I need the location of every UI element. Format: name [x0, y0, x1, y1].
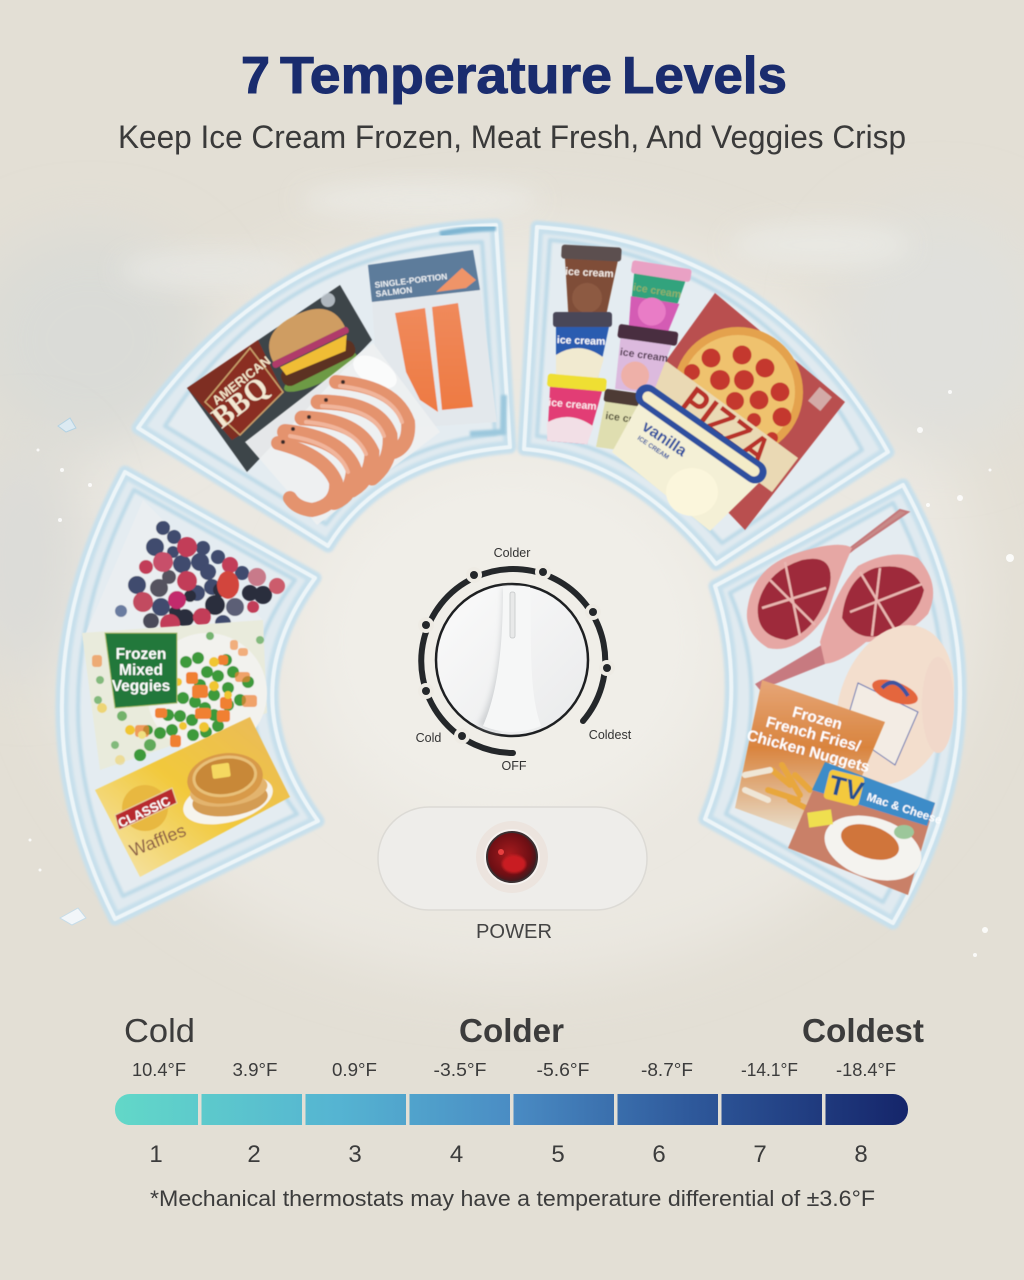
level numbers: 3 [348, 1141, 362, 1168]
food: pizza box [640, 293, 845, 530]
ice block [138, 225, 510, 546]
temperature values: -3.5°F [434, 1060, 486, 1080]
panel: top-right ice tray [524, 227, 888, 564]
dial labels: OFF [502, 759, 527, 773]
green veggie label [105, 633, 177, 708]
scale headings [124, 1012, 924, 1049]
band [640, 358, 798, 492]
food: pizza box: PIZZA [673, 379, 779, 474]
tub: pink lid [610, 324, 679, 397]
food: vanilla tub: vanilla [639, 418, 690, 460]
food: American BBQ box: BBQ [206, 370, 275, 435]
tub: yellow lid [542, 374, 607, 445]
food: frozen mixed veggies bag [82, 620, 267, 770]
tub: blue [553, 312, 612, 378]
tub: cream: ice cre [605, 410, 639, 427]
panel: top-left ice tray [138, 225, 510, 546]
food: salmon pack: SINGLE-PORTION [374, 271, 448, 290]
green veggie label: Veggies [112, 678, 170, 695]
subtitle: Keep Ice Cream Frozen, Meat Fresh, And Veggies Crisp [118, 119, 906, 155]
level numbers: 7 [753, 1141, 767, 1168]
green veggie label: Mixed [119, 662, 163, 679]
temperature values: -14.1°F [741, 1060, 798, 1080]
footnote: *Mechanical thermostats may have a temperature differential of ±3.6°F [150, 1186, 875, 1211]
temperature values: -5.6°F [536, 1060, 590, 1080]
scale headings: Coldest [802, 1012, 924, 1049]
temperature values: 0.9°F [332, 1060, 377, 1080]
power plate [378, 807, 647, 910]
food: shrimp tray [245, 343, 440, 525]
panel: right ice tray [705, 485, 974, 923]
level numbers: 1 [149, 1141, 163, 1168]
food: classic waffles box: CLASSIC [116, 793, 173, 831]
food: french fries bag: French Fries/ [764, 714, 863, 756]
panel: left ice tray [62, 472, 318, 919]
tub: pink lid: ice cream [619, 346, 669, 365]
level numbers: 5 [551, 1141, 565, 1168]
scale headings: Cold [124, 1012, 195, 1049]
food: American BBQ box [187, 285, 372, 472]
ice block [705, 485, 960, 923]
tub: chocolate: ice cream [565, 266, 614, 280]
food: french fries bag: Frozen [790, 704, 844, 733]
food: stacked ice cream tubs [542, 244, 692, 453]
food: vanilla tub: ICE CREAM [636, 435, 670, 461]
title: 7 [241, 47, 270, 105]
waffle stack [184, 748, 271, 821]
temperature scale [115, 1012, 924, 1211]
temperature values: 3.9°F [232, 1060, 278, 1080]
temperature values: 10.4°F [132, 1060, 186, 1080]
dial scale arc [418, 564, 615, 753]
tub: yellow lid: ice cream [548, 397, 597, 413]
level numbers: 2 [247, 1141, 261, 1168]
title [241, 47, 787, 105]
level numbers [149, 1141, 868, 1168]
food: french fries bag [735, 680, 885, 830]
power label: POWER [476, 921, 552, 943]
pizza [673, 327, 803, 457]
food: TV mac and cheese box: TV [826, 770, 867, 807]
level numbers: 8 [854, 1141, 868, 1168]
food: salmon pack: SALMON [375, 285, 413, 299]
tub: green [622, 260, 692, 339]
food: whole chicken [816, 610, 974, 800]
tub: cream [596, 388, 645, 453]
title: Levels [622, 47, 787, 105]
scale headings: Colder [459, 1012, 564, 1049]
temperature values: -18.4°F [836, 1060, 896, 1080]
level numbers: 6 [652, 1141, 666, 1168]
food: TV mac and cheese box [788, 762, 943, 895]
dial knob [436, 584, 588, 736]
water droplets and ice chips [28, 390, 1014, 957]
food: french fries bag: Chicken Nuggets [745, 727, 872, 776]
dial labels [416, 546, 632, 773]
food: steaks [747, 510, 933, 690]
food: TV mac and cheese box: Mac & Cheese [865, 791, 943, 827]
temperature values [132, 1060, 896, 1080]
food: American BBQ box: AMERICAN [209, 353, 273, 408]
food: salmon pack [368, 250, 497, 430]
dial labels: Cold [416, 731, 441, 745]
food: classic waffles box: Waffles [127, 820, 189, 861]
food: frozen berries bag [83, 500, 285, 640]
food: classic waffles box [95, 717, 290, 877]
veggies [92, 632, 264, 765]
tub: chocolate [558, 244, 622, 316]
temperature values: -8.7°F [641, 1060, 693, 1080]
green veggie label: Frozen [116, 646, 166, 663]
tub: green: ice cream [632, 282, 682, 301]
ice block [62, 472, 318, 919]
title: Temperature [280, 47, 612, 105]
dial labels: Colder [494, 546, 530, 560]
level numbers: 4 [450, 1141, 463, 1168]
temperature dial [416, 546, 632, 773]
dial labels: Coldest [589, 728, 632, 742]
power indicator lamp [476, 821, 548, 893]
ice block [524, 227, 888, 564]
gradient bar [115, 1094, 908, 1125]
food: vanilla tub [612, 394, 764, 531]
tub: blue: ice cream [557, 334, 606, 348]
